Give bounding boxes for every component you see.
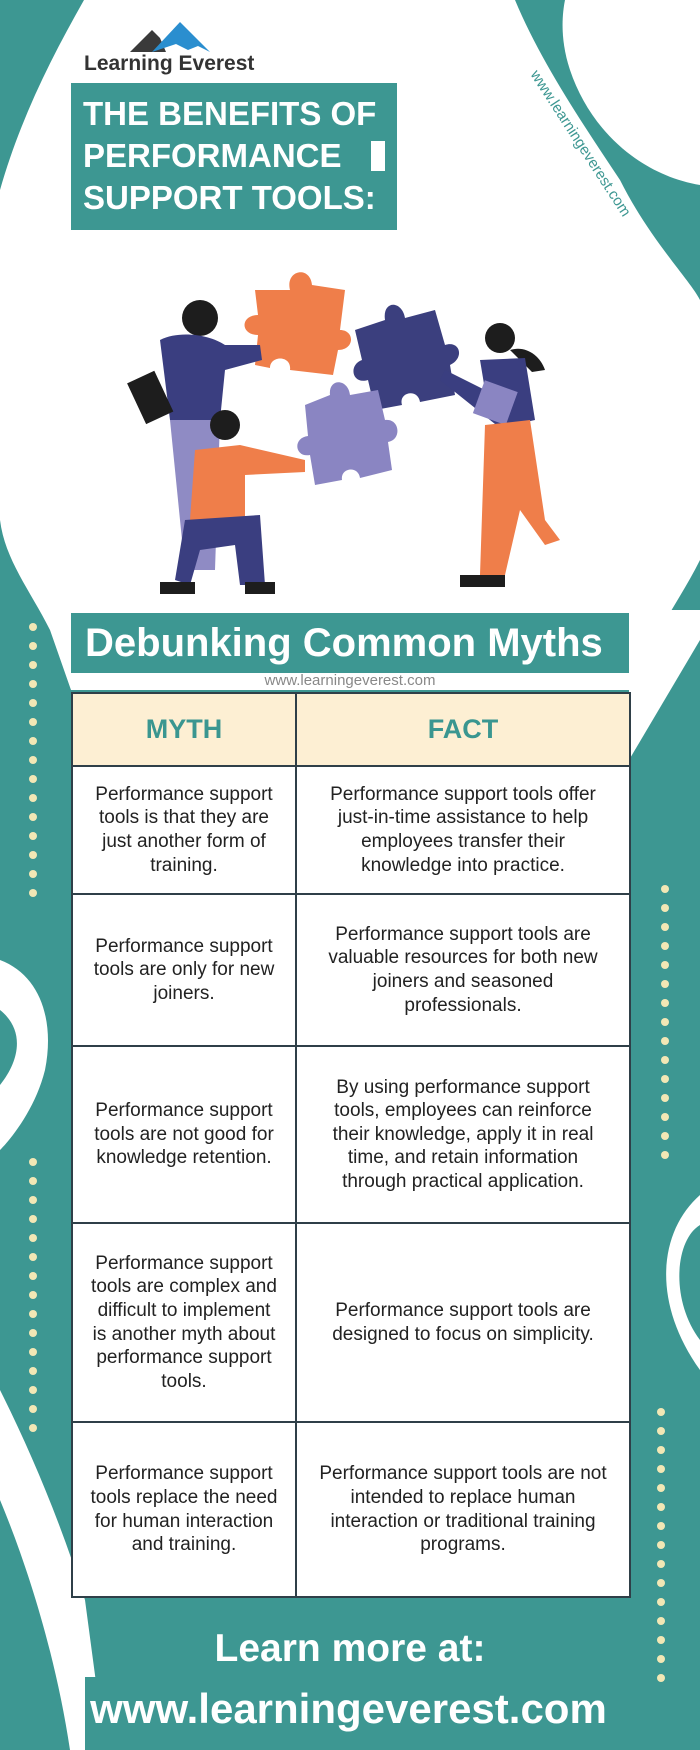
illustration: people with puzzle pieces <box>127 272 560 594</box>
table: myths vs facts: Performance support tools offer <box>330 784 596 805</box>
table: myths vs facts: tools replace the need <box>91 1487 277 1508</box>
footer url banner: www.learningeverest.com <box>90 1685 607 1732</box>
table: myths vs facts: tools are complex and <box>91 1276 277 1297</box>
table: myths vs facts: is another myth about <box>93 1324 275 1344</box>
table: myths vs facts: difficult to implement <box>98 1300 270 1321</box>
table: myths vs facts: just-in-time assistance to help <box>338 807 588 828</box>
table: myths vs facts: tools is that they are <box>99 807 269 828</box>
table: myths vs facts: Performance support tools are <box>335 1300 591 1321</box>
table: myths vs facts <box>71 692 631 1598</box>
table: myths vs facts: joiners and seasoned <box>373 971 553 992</box>
table: myths vs facts: tools. <box>161 1371 207 1392</box>
table: myths vs facts: Performance support <box>95 1463 273 1484</box>
table: myths vs facts: training. <box>150 855 218 876</box>
logo <box>84 22 254 75</box>
title <box>71 83 397 230</box>
banner: debunking <box>71 613 629 673</box>
title: THE BENEFITS OF <box>83 95 376 132</box>
table: myths vs facts: intended to replace human <box>350 1487 576 1508</box>
subtitle url: www.learningeverest.com <box>265 672 435 689</box>
table: myths vs facts: their knowledge, apply it in real <box>333 1124 593 1145</box>
table: myths vs facts: tools are not good for <box>94 1124 274 1145</box>
table: myths vs facts: through practical application. <box>342 1171 584 1192</box>
title: SUPPORT TOOLS: <box>83 179 376 216</box>
logo: Learning Everest <box>84 52 254 75</box>
table: myths vs facts: Performance support tools are not <box>319 1463 607 1484</box>
table: myths vs facts: for human interaction <box>95 1510 273 1532</box>
table: myths vs facts: FACT <box>428 714 498 744</box>
table: myths vs facts: professionals. <box>404 995 522 1016</box>
footer: learn more: Learn more at: <box>215 1627 485 1670</box>
table: myths vs facts: time, and retain information <box>348 1147 578 1168</box>
rotated url: www.learningeverest.com <box>527 67 634 220</box>
table: myths vs facts: Performance support <box>95 936 273 957</box>
table: myths vs facts: just another form of <box>102 831 266 852</box>
footer url banner <box>85 1677 612 1750</box>
table: myths vs facts: programs. <box>420 1534 506 1555</box>
table: myths vs facts: employees transfer their <box>361 831 565 852</box>
table: myths vs facts: performance support <box>96 1347 272 1368</box>
table: myths vs facts: tools, employees can reinforce <box>334 1100 592 1121</box>
table: myths vs facts: By using performance support <box>336 1077 590 1098</box>
table: myths vs facts: knowledge into practice. <box>361 855 565 876</box>
table: myths vs facts: Performance support <box>95 784 273 805</box>
table: myths vs facts: MYTH <box>146 714 222 744</box>
table: myths vs facts: joiners. <box>153 983 215 1004</box>
table: myths vs facts: and training. <box>132 1534 236 1555</box>
table: myths vs facts: Performance support <box>95 1100 273 1121</box>
table: myths vs facts: designed to focus on simplicity. <box>332 1324 594 1344</box>
table: myths vs facts: tools are only for new <box>94 959 274 980</box>
table: myths vs facts: Performance support tools are <box>335 924 591 945</box>
title: PERFORMANCE <box>83 137 342 174</box>
table: myths vs facts: interaction or traditional training <box>330 1510 596 1532</box>
table: myths vs facts: knowledge retention. <box>96 1147 272 1168</box>
table: myths vs facts: valuable resources for both new <box>328 947 598 968</box>
table: myths vs facts: Performance support <box>95 1253 273 1274</box>
banner: debunking: Debunking Common Myths <box>85 621 603 665</box>
